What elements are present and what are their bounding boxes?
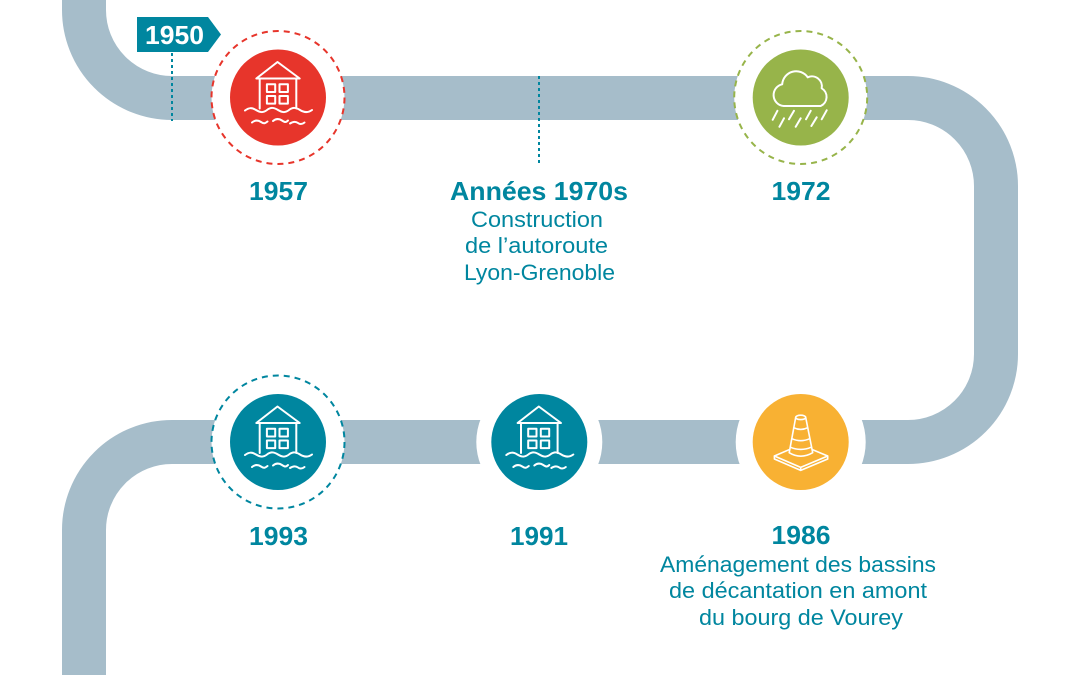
icon: traffic cone [774,415,828,470]
event: années 1970s: Construction [471,207,603,232]
milestone: 1991: 1991 [510,521,568,551]
milestone: 1986 [660,377,936,630]
milestone: 1993: 1993 [249,521,308,551]
event: années 1970s: Lyon-Grenoble [464,260,615,285]
flag: 1950 [137,17,221,52]
event: années 1970s: de l’autoroute [465,233,608,258]
milestone: 1957 [212,31,344,206]
text: description 1986: de décantation en amont [669,578,927,603]
flag: 1950: 1950 [145,20,204,50]
text: description 1986: Aménagement des bassins [660,552,936,577]
text: description 1986 [660,552,936,630]
milestone: 1972 [734,31,867,206]
marker line: 1950 [171,53,173,121]
milestone: 1972: 1972 [772,176,830,206]
text: description 1986: du bourg de Vourey [699,605,903,630]
milestone: 1957: 1957 [249,176,308,206]
marker line: années 1970s [538,76,540,164]
milestone: 1991 [476,379,602,551]
milestone: 1993 [212,376,344,551]
event: années 1970s: Années 1970s [450,176,628,206]
icon: rain cloud [773,71,827,127]
milestone: 1986: 1986 [772,520,830,550]
event: années 1970s [450,176,628,285]
